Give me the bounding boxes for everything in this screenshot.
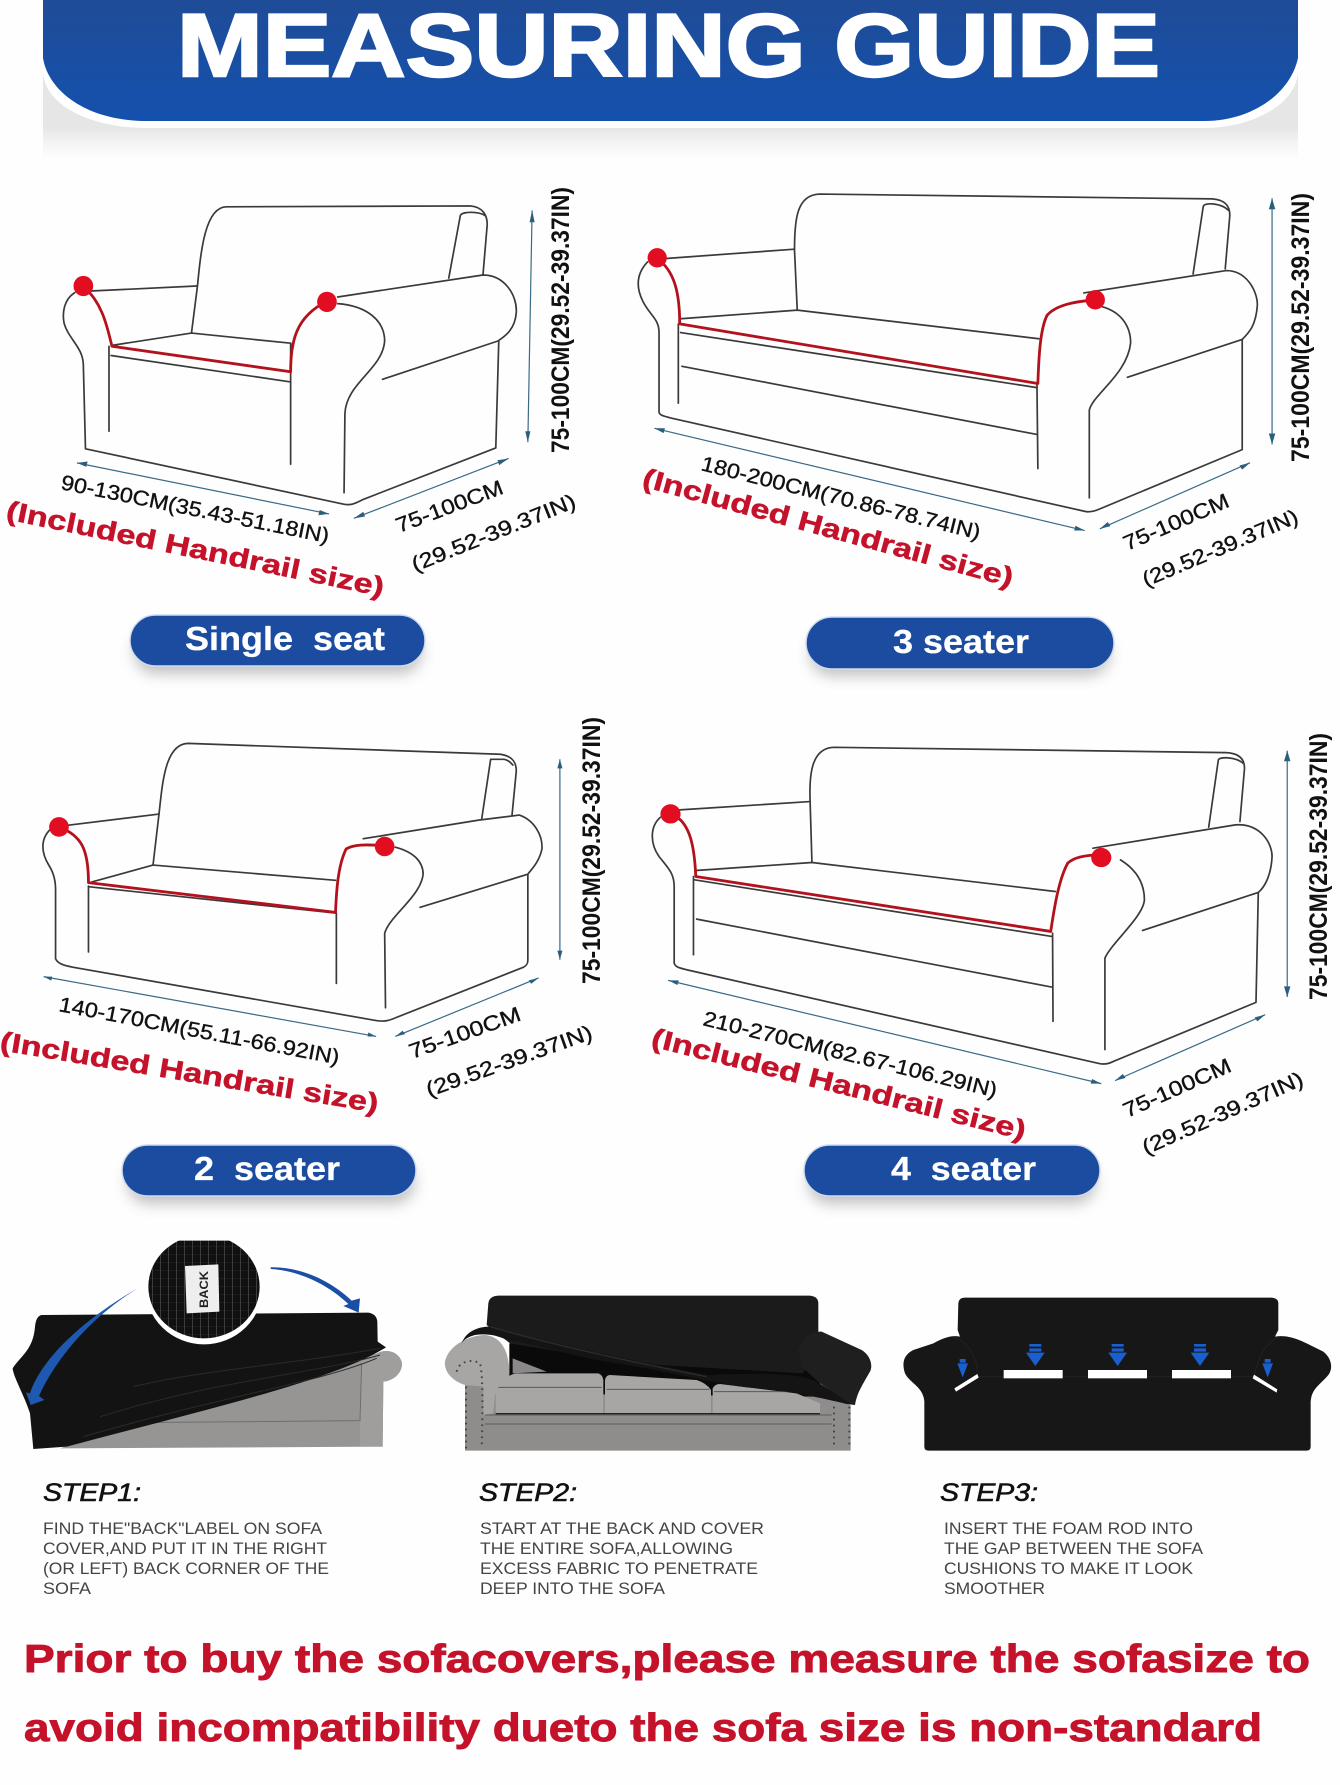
- handrail note: (Included Handrail size): [0, 1026, 381, 1118]
- height label: 75-100CM(29.52-39.37IN): [578, 717, 606, 984]
- panel: single seat: [4, 187, 579, 674]
- pill: 3 seater: [806, 617, 1114, 676]
- width label: 210-270CM(82.67-106.29IN): [701, 1008, 999, 1102]
- step 1 text: (OR LEFT) BACK CORNER OF THE: [43, 1559, 329, 1578]
- depth label cm: 75-100CM: [406, 1003, 524, 1064]
- pill: single seat: [130, 615, 425, 674]
- depth label inches: (29.52-39.37IN): [1139, 1068, 1307, 1160]
- handrail note: (Included Handrail size): [639, 463, 1017, 593]
- step 1 text: SOFA: [43, 1579, 92, 1598]
- pill: 2 seater: [122, 1145, 416, 1204]
- depth label inches: (29.52-39.37IN): [423, 1021, 596, 1102]
- depth label cm: 75-100CM: [393, 476, 506, 538]
- panel: 2 seater: [0, 717, 606, 1204]
- bottom warning: [24, 1638, 1310, 1750]
- step 3 text: [940, 1479, 1204, 1598]
- photo: step 3 sofa: [903, 1298, 1331, 1451]
- panel: 4 seater: [649, 733, 1333, 1204]
- panel: 3 seater: [638, 193, 1315, 676]
- step 3 text: SMOOTHER: [944, 1579, 1045, 1598]
- pill: single seat: Single seat: [185, 620, 385, 657]
- depth label inches: (29.52-39.37IN): [1139, 505, 1302, 592]
- height label: 75-100CM(29.52-39.37IN): [1305, 733, 1333, 1000]
- back label: BACK: [197, 1271, 211, 1308]
- step 3 text: INSERT THE FOAM ROD INTO: [944, 1519, 1193, 1538]
- step 1 text: [43, 1479, 329, 1598]
- step 3 text: CUSHIONS TO MAKE IT LOOK: [944, 1559, 1194, 1578]
- sofa outline: 4 seater: [652, 747, 1290, 1084]
- width label: 180-200CM(70.86-78.74IN): [699, 453, 983, 544]
- depth label cm: 75-100CM: [1120, 1054, 1235, 1123]
- step 1 text: STEP1:: [43, 1479, 141, 1507]
- step 1 text: COVER,AND PUT IT IN THE RIGHT: [43, 1539, 327, 1558]
- height label: 75-100CM(29.52-39.37IN): [1287, 193, 1315, 462]
- step 2 text: DEEP INTO THE SOFA: [480, 1579, 666, 1598]
- step 2 text: THE ENTIRE SOFA,ALLOWING: [480, 1539, 733, 1558]
- step 3 text: THE GAP BETWEEN THE SOFA: [944, 1539, 1204, 1558]
- depth label inches: (29.52-39.37IN): [408, 490, 579, 577]
- bottom warning: avoid incompatibility dueto the sofa size is non-standard: [24, 1707, 1262, 1750]
- pill: 2 seater: 2 seater: [194, 1150, 340, 1187]
- step 2 text: START AT THE BACK AND COVER: [480, 1519, 764, 1538]
- sofa outline: 3 seater: [638, 194, 1275, 531]
- width label: 90-130CM(35.43-51.18IN): [59, 471, 331, 548]
- sofa outline: 2 seater: [43, 743, 562, 1036]
- width label: 140-170CM(55.11-66.92IN): [57, 993, 341, 1069]
- photo: step 2 sofa: [445, 1296, 871, 1451]
- bottom warning: Prior to buy the sofacovers,please measure the sofasize to: [24, 1638, 1310, 1681]
- height label: 75-100CM(29.52-39.37IN): [547, 187, 575, 453]
- pill: 4 seater: [804, 1145, 1100, 1204]
- handrail note: (Included Handrail size): [4, 495, 387, 602]
- step 1 text: FIND THE"BACK"LABEL ON SOFA: [43, 1519, 323, 1538]
- step 2 text: STEP2:: [479, 1479, 577, 1507]
- depth label cm: 75-100CM: [1120, 490, 1233, 556]
- handrail note: (Included Handrail size): [649, 1023, 1029, 1146]
- step 2 text: [479, 1479, 764, 1598]
- pill: 4 seater: 4 seater: [891, 1150, 1036, 1187]
- pill: 3 seater: 3 seater: [893, 623, 1029, 660]
- photo: step 1 sofa: [13, 1230, 402, 1449]
- title banner: [43, 0, 1298, 160]
- step 2 text: EXCESS FABRIC TO PENETRATE: [480, 1559, 758, 1578]
- sofa outline: single seat: [63, 206, 535, 518]
- step 3 text: STEP3:: [940, 1479, 1038, 1507]
